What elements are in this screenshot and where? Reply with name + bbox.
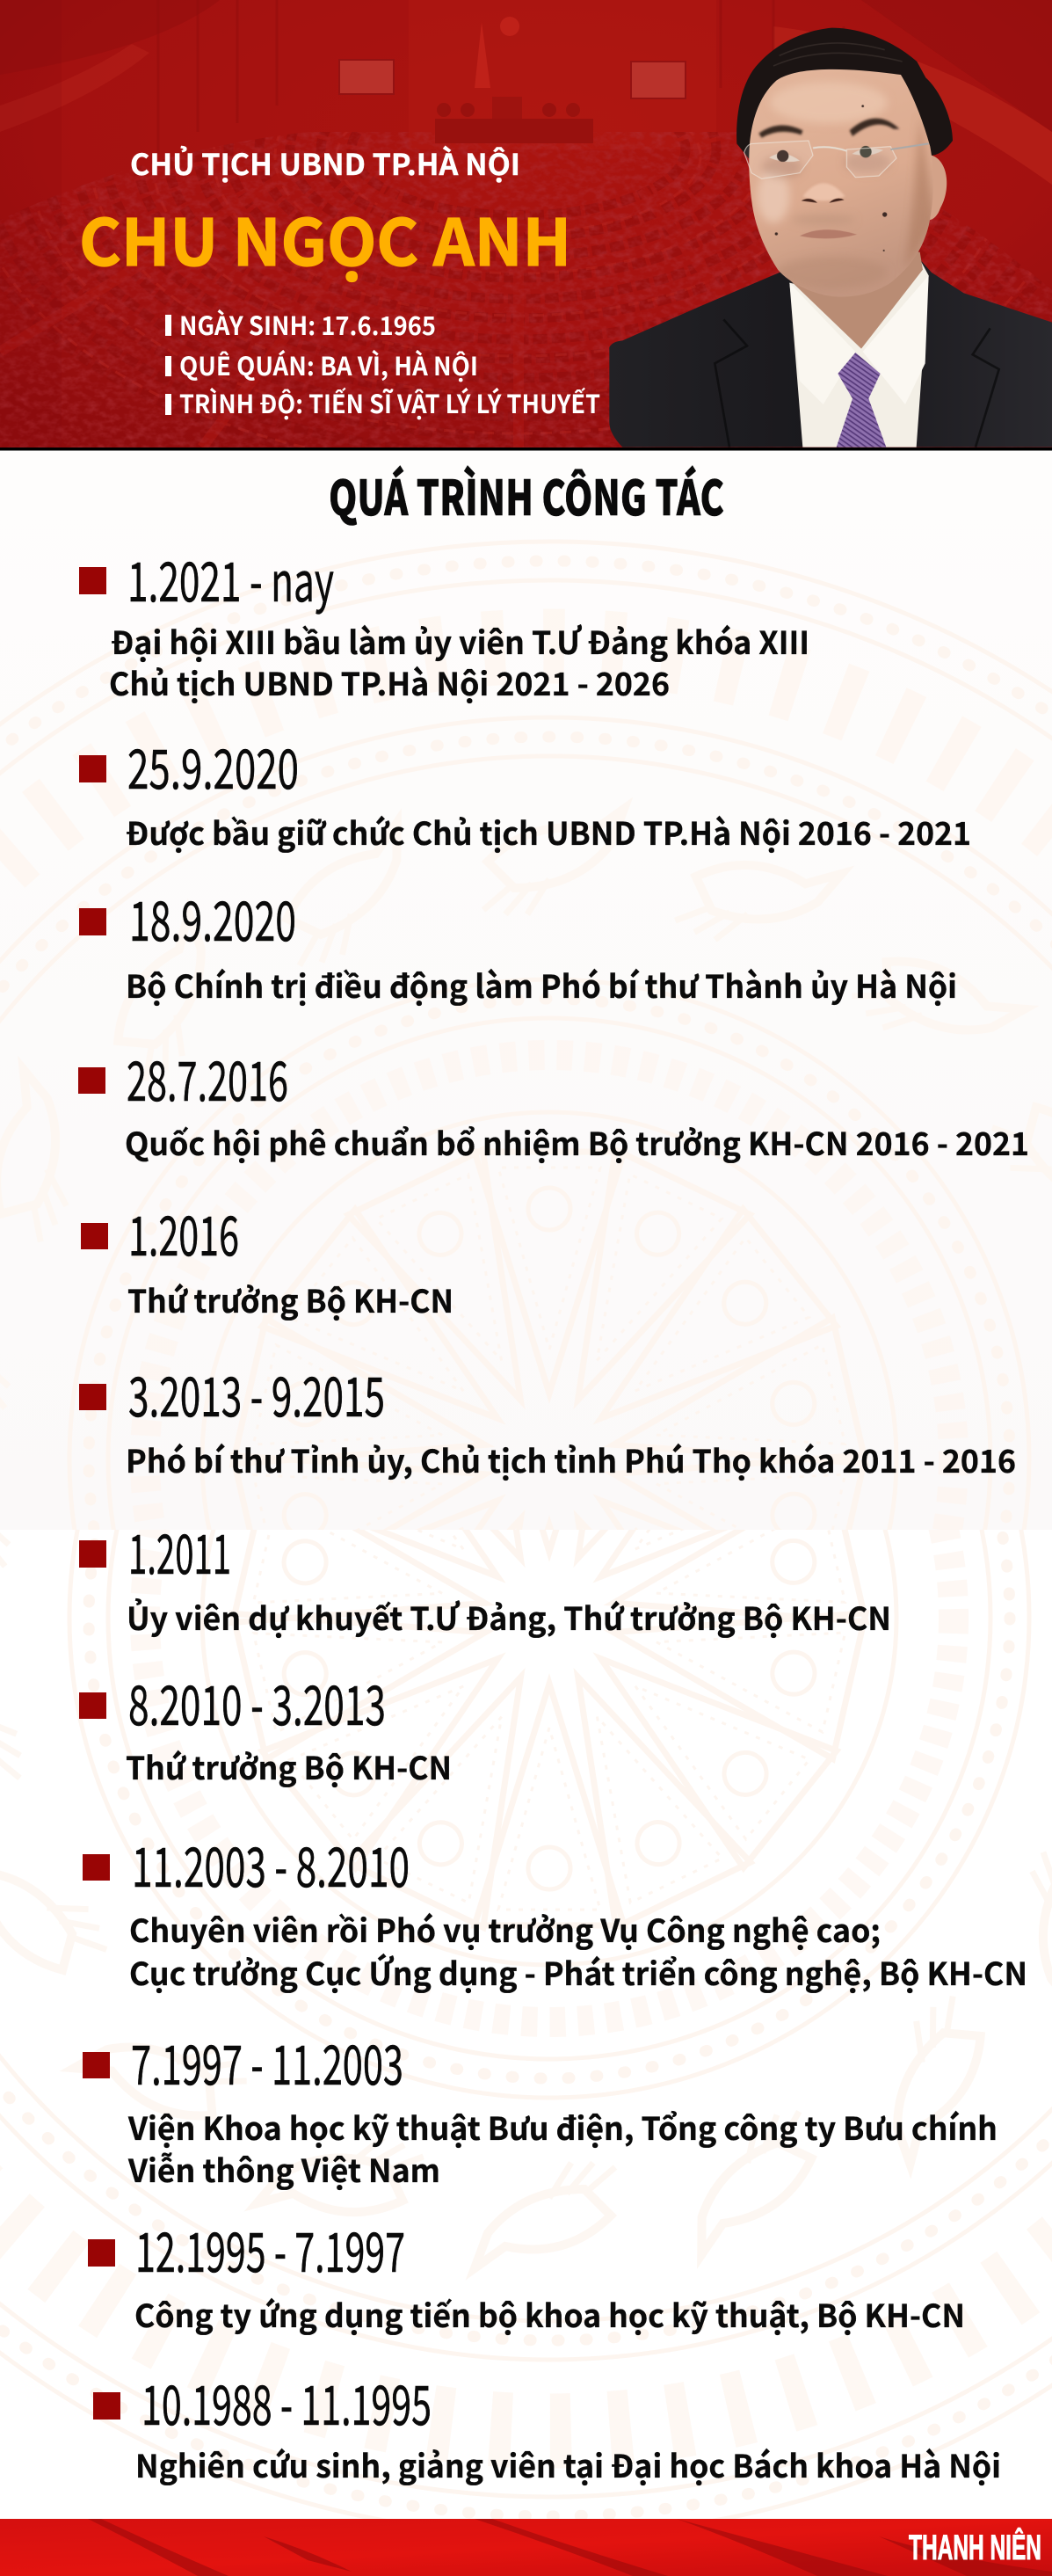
entry 10.1988 - 11.1995 — [93, 2361, 1001, 2487]
heading: name: CHU NGỌC ANH — [79, 192, 571, 285]
entry 7.1997 - 11.2003 — [83, 2021, 998, 2192]
entry 11.2003 - 8.2010 — [83, 1823, 1027, 1995]
entry 1.2011: Ủy viên dự khuyết T.Ư Đảng, Thứ trưởng Bộ KH-CN — [127, 1594, 891, 1640]
entry 1.2011 — [79, 1510, 891, 1640]
heading: career history: QUÁ TRÌNH CÔNG TÁC — [329, 459, 724, 529]
entry 12.1995 - 7.1997: 12.1995 - 7.1997 — [135, 2209, 405, 2288]
entry 3.2013 - 9.2015: Phó bí thư Tỉnh ủy, Chủ tịch tỉnh Phú Thọ khóa 2011 - 2016 — [126, 1437, 1016, 1482]
nose — [802, 183, 845, 200]
entry 1.2021 - nay: Đại hội XIII bầu làm ủy viên T.Ư Đảng khóa XIII — [111, 618, 809, 664]
tie — [837, 353, 886, 448]
entry 8.2010 - 3.2013: Thứ trưởng Bộ KH-CN — [126, 1743, 452, 1789]
neck and shirt — [789, 259, 929, 448]
entry 25.9.2020: Được bầu giữ chức Chủ tịch UBND TP.Hà Nội 2016 - 2021 — [126, 809, 971, 855]
entry 11.2003 - 8.2010: Chuyên viên rồi Phó vụ trưởng Vụ Công nghệ cao; — [129, 1906, 881, 1952]
entry 7.1997 - 11.2003: 7.1997 - 11.2003 — [131, 2021, 403, 2100]
footer: red flag band — [0, 2519, 1052, 2576]
entry 11.2003 - 8.2010: 11.2003 - 8.2010 — [132, 1823, 410, 1903]
entry 1.2021 - nay: 1.2021 - nay — [127, 538, 334, 617]
face shading — [758, 82, 934, 288]
entry 11.2003 - 8.2010: Cục trưởng Cục Ứng dụng - Phát triển công nghệ, Bộ KH-CN — [129, 1949, 1027, 1995]
mouth — [800, 229, 857, 238]
portrait — [609, 28, 1052, 448]
brows and eyes — [758, 119, 899, 138]
divider bar — [0, 448, 1052, 450]
entry 3.2013 - 9.2015: 3.2013 - 9.2015 — [128, 1353, 385, 1432]
entry 7.1997 - 11.2003: Viễn thông Việt Nam — [127, 2146, 440, 2192]
face — [749, 69, 933, 297]
entry 12.1995 - 7.1997: Công ty ứng dụng tiến bộ khoa học kỹ thuật, Bộ KH-CN — [134, 2291, 965, 2337]
entry 28.7.2016: 28.7.2016 — [127, 1037, 288, 1117]
header banner — [0, 0, 1052, 475]
ear — [923, 156, 947, 220]
entry 1.2016: 1.2016 — [128, 1192, 239, 1271]
entry 18.9.2020: 18.9.2020 — [129, 877, 296, 957]
entry 1.2021 - nay: Chủ tịch UBND TP.Hà Nội 2021 - 2026 — [109, 659, 670, 705]
entry 25.9.2020 — [79, 725, 971, 855]
hair — [736, 28, 953, 164]
entry 18.9.2020: Bộ Chính trị điều động làm Phó bí thư Thành ủy Hà Nội — [126, 962, 957, 1008]
glasses — [744, 141, 896, 178]
info: hometown: QUÊ QUÁN: BA VÌ, HÀ NỘI — [179, 346, 478, 383]
entry 1.2016 — [81, 1192, 453, 1322]
entry 28.7.2016 — [78, 1037, 1029, 1165]
moles — [775, 105, 887, 251]
entry 8.2010 - 3.2013 — [79, 1662, 452, 1789]
heading: position: CHỦ TỊCH UBND TP.HÀ NỘI — [130, 142, 520, 184]
entry 12.1995 - 7.1997 — [88, 2209, 965, 2337]
info: birth date: NGÀY SINH: 17.6.1965 — [179, 306, 436, 343]
entry 3.2013 - 9.2015 — [79, 1353, 1016, 1482]
entry 8.2010 - 3.2013: 8.2010 - 3.2013 — [128, 1662, 386, 1741]
entry 1.2021 - nay — [79, 538, 809, 705]
entry 25.9.2020: 25.9.2020 — [127, 725, 299, 804]
suit — [609, 259, 1052, 448]
info: education: TRÌNH ĐỘ: TIẾN SĨ VẬT LÝ LÝ THUYẾT — [179, 384, 600, 421]
entry 7.1997 - 11.2003: Viện Khoa học kỹ thuật Bưu điện, Tổng công ty Bưu chính — [127, 2104, 998, 2150]
entry 10.1988 - 11.1995: Nghiên cứu sinh, giảng viên tại Đại học Bách khoa Hà Nội — [135, 2441, 1001, 2487]
entry 1.2016: Thứ trưởng Bộ KH-CN — [127, 1277, 453, 1322]
entry 18.9.2020 — [79, 877, 957, 1008]
entry 10.1988 - 11.1995: 10.1988 - 11.1995 — [141, 2361, 432, 2441]
entry 1.2011: 1.2011 — [128, 1510, 231, 1590]
background: red parliament hall — [0, 0, 1052, 475]
entry 28.7.2016: Quốc hội phê chuẩn bổ nhiệm Bộ trưởng KH-CN 2016 - 2021 — [125, 1119, 1029, 1165]
